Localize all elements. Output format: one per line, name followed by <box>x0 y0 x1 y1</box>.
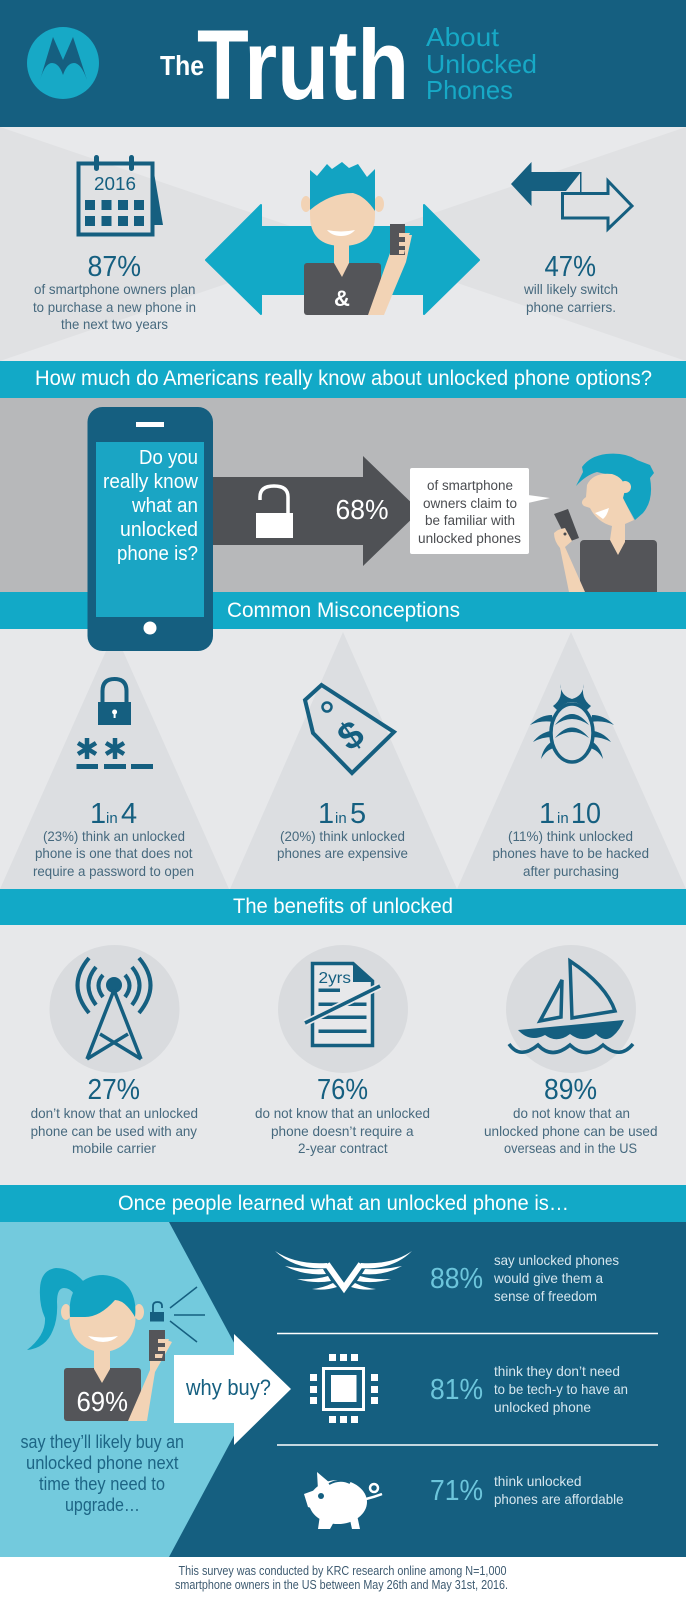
stat: 27 percent: mobile carrier <box>72 1140 156 1156</box>
heading band: common misconceptions: Common Misconceptions <box>227 599 460 622</box>
heading band: once people learned <box>0 1185 686 1222</box>
stat: 88 percent: would give them a <box>493 1270 603 1286</box>
stat: 88 percent: sense of freedom <box>494 1288 597 1304</box>
stat: 88 percent: 88% <box>430 1263 483 1295</box>
icon: price tag <box>305 685 394 773</box>
stat: 1 in 4: in <box>106 810 118 827</box>
stat: 1 in 10: (11%) think unlocked <box>508 828 633 844</box>
figure: man with phone: & <box>334 286 350 311</box>
stat: 27 percent: don’t know that an unlocked <box>31 1105 198 1121</box>
stat: 1 in 5 <box>277 798 408 861</box>
stat: 27 percent: 27% <box>88 1074 140 1106</box>
stat: 47 percent: will likely switch <box>523 281 618 297</box>
stat: 47 percent <box>523 251 618 315</box>
speech bubble: of smartphone <box>427 478 513 493</box>
icon: contract crossed out: 2yrs <box>318 970 351 987</box>
stat: 89 percent: overseas and in the US <box>504 1140 637 1156</box>
stat: 87 percent <box>33 251 196 332</box>
speech bubble: be familiar with <box>425 513 515 528</box>
icon: chip <box>310 1354 378 1423</box>
icon: phone with question: what an <box>131 495 198 517</box>
stat: 81 percent <box>430 1363 628 1415</box>
stat: 47 percent: phone carriers. <box>526 299 616 315</box>
title: The <box>160 50 204 81</box>
stat: 27 percent <box>31 1074 198 1156</box>
figure: man looking at phone <box>554 454 657 600</box>
stat: 71 percent <box>430 1473 624 1507</box>
header <box>0 0 686 127</box>
icon: cell tower <box>78 958 150 1059</box>
stat: 1 in 4: (23%) think an unlocked <box>43 828 185 844</box>
stat: 1 in 5: phones are expensive <box>277 845 408 861</box>
icon: small open lock with rays <box>150 1287 205 1342</box>
stat: 1 in 4: require a password to open <box>33 863 194 879</box>
icon: price tag: $ <box>330 713 372 759</box>
icon: wings <box>275 1251 412 1290</box>
stat: 1 in 10: 10 <box>571 798 601 830</box>
heading band: the benefits of unlocked: The benefits of unlocked <box>233 895 453 918</box>
panel: familiarity with unlocked phones <box>0 398 686 600</box>
text: 69 percent caption: time they need to <box>39 1474 165 1494</box>
panel: misconceptions <box>0 629 686 889</box>
stat: 76 percent: 2-year contract <box>298 1140 388 1156</box>
stat: 1 in 4: 1 <box>90 798 106 830</box>
stat: 1 in 4: 4 <box>121 798 137 830</box>
stat: 76 percent <box>255 1074 430 1156</box>
title: About <box>426 22 500 52</box>
panel: why buy <box>0 1222 686 1557</box>
stat: 1 in 10: phones have to be hacked <box>492 845 649 861</box>
icon: phone with question <box>88 407 213 651</box>
stat: 88 percent: say unlocked phones <box>494 1252 619 1268</box>
stat: 1 in 10: after purchasing <box>523 863 619 879</box>
arrow: dark with lock and 68 percent: 68% <box>336 494 388 525</box>
stat: 81 percent: 81% <box>430 1374 483 1406</box>
footer note: This survey was conducted by KRC research online among N=1,000 <box>178 1564 507 1578</box>
stat: 1 in 10: 1 <box>539 798 555 830</box>
panel: upgrade and switch stats <box>0 127 686 361</box>
stat: 71 percent: think unlocked <box>494 1473 582 1489</box>
arrow: why buy: why buy? <box>185 1375 271 1400</box>
icon: sailboat <box>509 961 633 1052</box>
title: Unlocked <box>426 49 537 79</box>
stat: 1 in 10 <box>492 798 649 879</box>
figure: woman with phone <box>27 1268 172 1421</box>
icon: phone with question: phone is? <box>117 543 198 565</box>
figure: woman with phone: 69% <box>76 1386 128 1417</box>
stat: 88 percent <box>430 1252 619 1304</box>
stat: 1 in 10: in <box>557 810 569 827</box>
stat: 27 percent: phone can be used with any <box>31 1123 197 1139</box>
arrow: dark with lock and 68 percent <box>210 456 420 566</box>
stat: 81 percent: think they don’t need <box>494 1363 620 1379</box>
stat: 1 in 5: (20%) think unlocked <box>280 828 405 844</box>
icon: phone with question: Do you <box>139 447 198 469</box>
stat: 81 percent: unlocked phone <box>494 1399 591 1415</box>
heading band: how much do Americans know: How much do Americans really know about unlocked phone options? <box>35 367 652 390</box>
stat: 81 percent: to be tech-y to have an <box>494 1381 628 1397</box>
stat: 1 in 5: 1 <box>318 798 334 830</box>
text: 69 percent caption <box>20 1432 184 1515</box>
speech bubble <box>410 468 550 554</box>
footer note: smartphone owners in the US between May 26th and May 31st, 2016. <box>175 1578 508 1592</box>
icon: phone with question: unlocked <box>120 519 198 541</box>
speech bubble: owners claim to <box>423 496 517 511</box>
title: Truth <box>197 9 409 120</box>
stat: 76 percent: do not know that an unlocked <box>255 1105 430 1121</box>
stat: 89 percent <box>484 1074 658 1156</box>
stat: 89 percent: unlocked phone can be used <box>484 1123 658 1139</box>
text: 69 percent caption: say they’ll likely buy an <box>20 1432 184 1452</box>
icon: phone with question: really know <box>103 471 199 493</box>
stat: 87 percent: to purchase a new phone in <box>33 299 196 315</box>
stat: 1 in 5: in <box>335 810 347 827</box>
stat: 47 percent: 47% <box>544 251 596 283</box>
heading band: common misconceptions <box>0 592 686 629</box>
icon: switching arrows <box>511 162 632 229</box>
arrow: double headed <box>206 205 479 314</box>
title: Phones <box>426 75 513 105</box>
text: 69 percent caption: upgrade… <box>65 1495 140 1515</box>
arrow: why buy <box>174 1334 291 1445</box>
stat: 89 percent: 89% <box>544 1074 597 1106</box>
stat: 87 percent: the next two years <box>61 316 168 332</box>
title <box>160 9 537 120</box>
stat: 87 percent: of smartphone owners plan <box>34 281 196 297</box>
stat: 76 percent: phone doesn’t require a <box>271 1123 414 1139</box>
figure: man with phone <box>301 162 412 315</box>
stat: 71 percent: 71% <box>430 1475 483 1507</box>
speech bubble: unlocked phones <box>418 531 521 546</box>
icon: contract crossed out <box>305 962 380 1046</box>
icon: motorola logo <box>27 27 99 99</box>
panel: benefits <box>0 925 686 1185</box>
stat: 1 in 5: 5 <box>350 798 366 830</box>
stat: 1 in 4: phone is one that does not <box>35 845 193 861</box>
icon: calendar: 2016 <box>94 174 136 194</box>
icon: bug <box>530 684 614 762</box>
text: 69 percent caption: unlocked phone next <box>26 1453 178 1473</box>
stat: 71 percent: phones are affordable <box>494 1491 624 1507</box>
stat: 76 percent: 76% <box>317 1074 368 1106</box>
stat: 1 in 4 <box>33 798 194 879</box>
stat: 87 percent: 87% <box>88 251 141 283</box>
heading band: once people learned: Once people learned what an unlocked phone is… <box>118 1192 569 1215</box>
heading band: the benefits of unlocked <box>0 889 686 925</box>
icon: piggy bank <box>304 1472 382 1529</box>
icon: calendar <box>78 155 163 234</box>
footer note <box>175 1564 508 1592</box>
heading band: how much do Americans know <box>0 361 686 398</box>
stat: 89 percent: do not know that an <box>513 1105 630 1121</box>
icon: lock and password <box>76 679 153 769</box>
